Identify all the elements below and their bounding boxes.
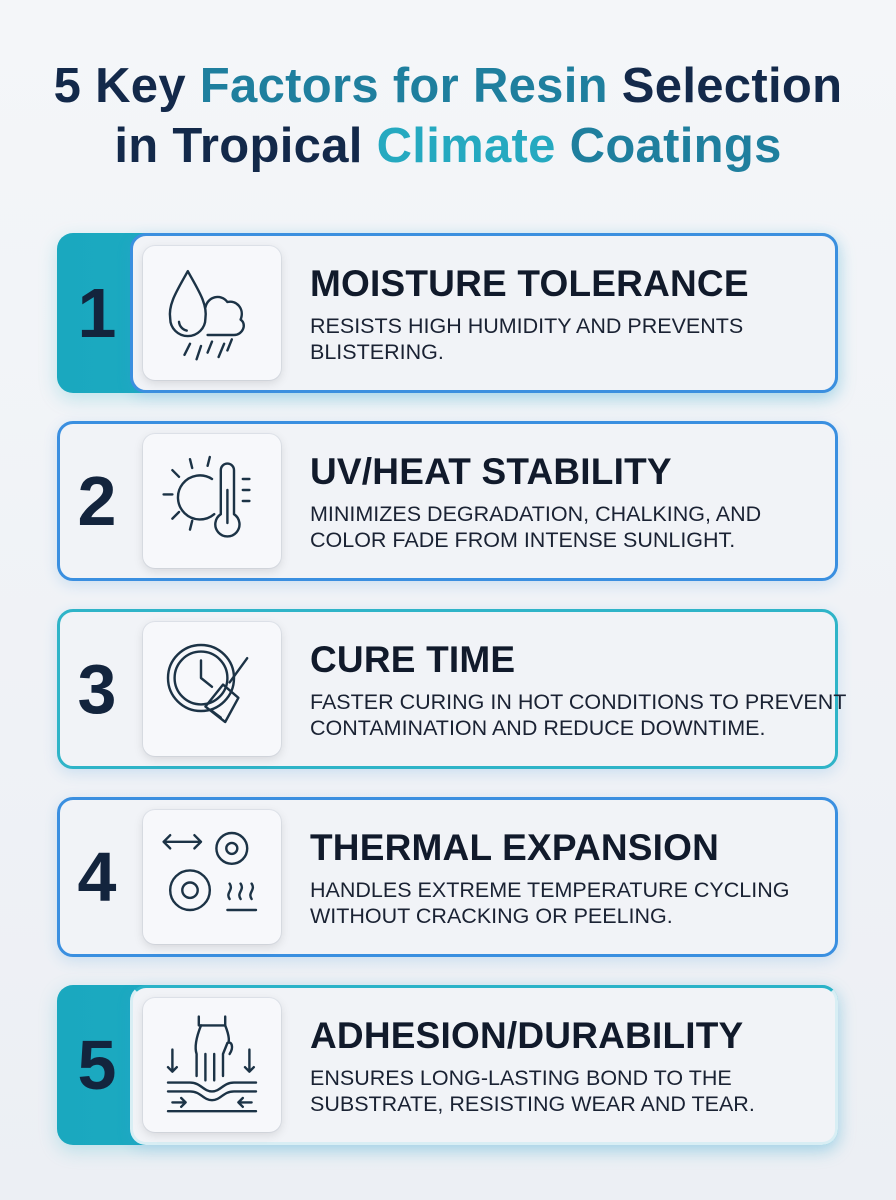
icon: clock brush [143,622,281,756]
icon: water drop cloud rain [143,246,281,380]
body text: FASTER CURING IN HOT CONDITIONS TO PREVENT [310,690,846,714]
number 3: 3 [78,650,116,728]
panel: adhesion durability [57,985,838,1145]
icon: hand pressing substrate [143,998,281,1132]
heading: MOISTURE TOLERANCE [310,263,749,304]
title: 5 Key Factors for Resin Selection [54,59,842,113]
body text: COLOR FADE FROM INTENSE SUNLIGHT. [310,528,735,552]
panel: thermal expansion [52,796,844,966]
body text: RESISTS HIGH HUMIDITY AND PREVENTS [310,314,743,338]
body text: BLISTERING. [310,340,444,364]
body text [310,314,743,364]
panel: cure time [52,608,846,778]
body text: WITHOUT CRACKING OR PEELING. [310,904,673,928]
body text: SUBSTRATE, RESISTING WEAR AND TEAR. [310,1092,755,1116]
body text [310,1066,755,1116]
icon: sun thermometer [143,434,281,568]
icon: gears arrows heat [143,810,281,944]
title [54,59,842,173]
number 1: 1 [78,274,116,352]
number 4: 4 [78,838,116,916]
body text [310,690,846,740]
body text [310,878,789,928]
panel: uv heat stability [52,420,844,590]
body text [310,502,761,552]
heading: UV/HEAT STABILITY [310,451,672,492]
body text: HANDLES EXTREME TEMPERATURE CYCLING [310,878,789,902]
number 2: 2 [78,462,116,540]
panel: moisture tolerance [57,233,838,393]
body text: MINIMIZES DEGRADATION, CHALKING, AND [310,502,761,526]
body text: ENSURES LONG-LASTING BOND TO THE [310,1066,732,1090]
number 5: 5 [78,1026,116,1104]
heading: CURE TIME [310,639,515,680]
heading: ADHESION/DURABILITY [310,1015,743,1056]
body text: CONTAMINATION AND REDUCE DOWNTIME. [310,716,765,740]
title: in Tropical Climate Coatings [114,119,782,173]
heading: THERMAL EXPANSION [310,827,719,868]
